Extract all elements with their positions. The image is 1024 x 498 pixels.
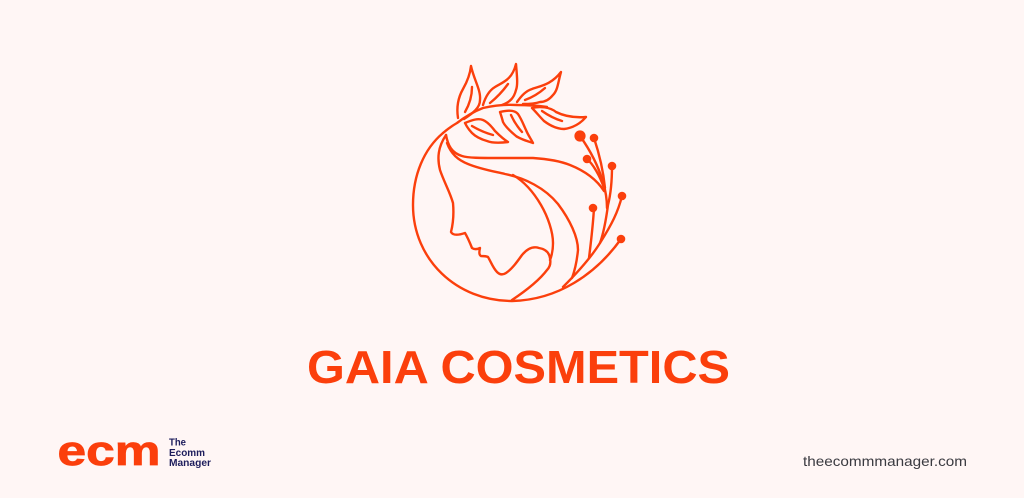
ecm wordmark: ecm — [58, 427, 160, 474]
title: GAIA COSMETICS — [307, 341, 730, 393]
hair strands — [446, 135, 604, 191]
outer circle arc and lower stem — [413, 133, 621, 301]
botanical stems and berries — [563, 130, 626, 287]
brand logo: ecm The Ecomm Manager — [58, 427, 211, 474]
leaf branch — [443, 64, 586, 143]
tagline: The — [169, 438, 186, 448]
website url: theecommmanager.com — [803, 453, 967, 469]
face profile — [438, 135, 550, 300]
tagline — [169, 438, 211, 469]
tagline: Manager — [169, 458, 211, 469]
tagline: Ecomm — [169, 448, 205, 459]
icon: Gaia Cosmetics logo — [413, 64, 626, 301]
